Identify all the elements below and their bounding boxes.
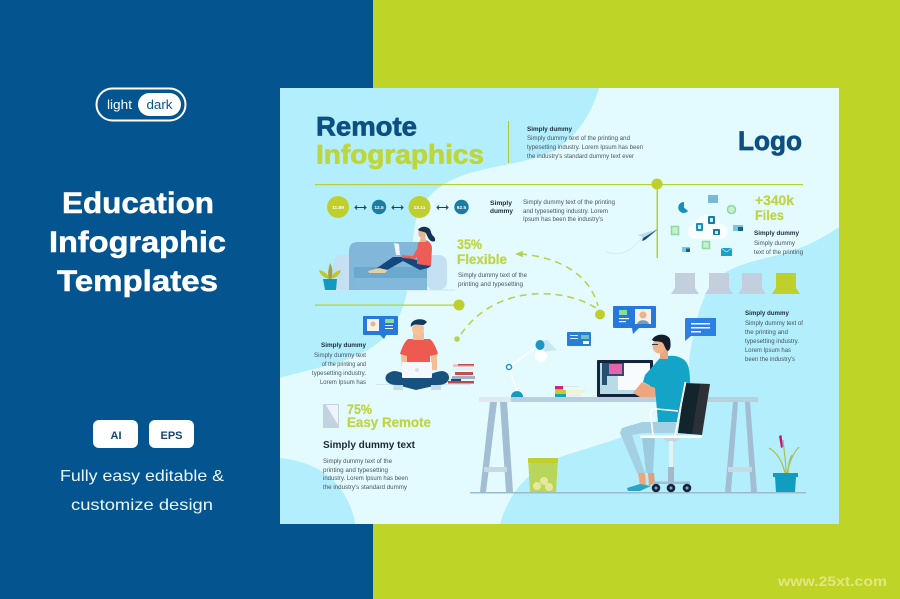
illustration: desk (479, 397, 758, 492)
stat: 35% flexible: 35% (457, 237, 482, 252)
stat: 35% flexible (457, 237, 528, 288)
text: simply dummy left (312, 342, 367, 386)
heading: education infographic templates: Education (62, 187, 214, 220)
text: editable description: customize design (71, 497, 213, 514)
heading: education infographic templates: Infographic (49, 226, 226, 259)
speech bubble: video call (363, 316, 398, 339)
divider with node: top (315, 178, 803, 258)
text block: simply dummy text: Simply dummy text (323, 439, 415, 451)
toggle: light and dark: dark (146, 98, 173, 112)
title: Infographics (316, 140, 484, 170)
stat: 75% easy remote: 75% (347, 402, 372, 417)
icon cluster: cloud files (672, 195, 743, 256)
text: simply dummy left: of the printing and (322, 362, 366, 368)
toggle: light and dark (96, 88, 186, 120)
badge: EPS (149, 420, 194, 448)
text: simply dummy right: the printing and (745, 330, 788, 336)
infographic panel (280, 88, 839, 524)
text block: simply dummy text (323, 439, 415, 491)
icon: potted plant right (769, 435, 799, 492)
text: simply dummy left: Simply dummy (321, 342, 367, 349)
stat: 75% easy remote (323, 402, 431, 430)
stat: +340k files: +340k (755, 193, 794, 208)
text: simply dummy right: typesetting industry. (745, 339, 799, 345)
background: navy left column (0, 0, 373, 599)
dashed arrows (455, 252, 605, 341)
logo: Logo (738, 126, 802, 156)
text: simply dummy steps: Simply dummy text of the printing (523, 200, 615, 206)
icon: paper plane (606, 229, 658, 254)
illustration: man working at desk (620, 335, 690, 491)
text: simply dummy right: Lorem Ipsum has (745, 348, 791, 354)
background blob: bottom left (280, 458, 355, 524)
step sequence: 11.89 (332, 205, 344, 211)
illustration: man sitting with laptop (376, 319, 471, 390)
stat: 35% flexible: printing and typesetting (458, 282, 523, 288)
intro text block: Simply dummy text of the printing and (527, 136, 630, 142)
divider with node: middle (315, 300, 464, 310)
icon: potted plant left (319, 263, 341, 290)
text: simply dummy right: Simply dummy text of (745, 321, 803, 327)
icon: desk lamp (506, 340, 557, 397)
icon: books on desk (555, 386, 585, 397)
text: simply dummy left: typesetting industry. (312, 371, 366, 377)
text block: simply dummy text: industry. Lorem Ipsum has been (323, 476, 408, 482)
badge: EPS: EPS (160, 430, 183, 442)
text: simply dummy left: Simply dummy text (314, 353, 366, 359)
left column: promotional content (49, 88, 226, 514)
text: editable description: Fully easy editable & (60, 468, 224, 485)
heading: education infographic templates (49, 187, 226, 298)
step sequence (327, 196, 469, 218)
illustration: monitor (597, 360, 653, 397)
text block: simply dummy text: Simply dummy text of the (323, 459, 393, 465)
intro text block: Simply dummy (527, 126, 573, 133)
text: simply dummy right: been the industry's (745, 357, 795, 363)
heading: education infographic templates: Templates (57, 265, 218, 298)
stat: +340k files (754, 193, 803, 256)
background blob: right (500, 227, 839, 524)
floor line (470, 492, 806, 494)
title: Remote (316, 112, 417, 142)
text: simply dummy right: Simply dummy (745, 310, 790, 317)
text: simply dummy steps: Simply (490, 200, 513, 207)
stat: +340k files: Simply dummy (754, 241, 795, 247)
watermark: www.25xt.com (777, 573, 887, 589)
text block: simply dummy text: the industry's standard dummy (323, 485, 407, 491)
speech bubble: message (685, 318, 716, 341)
speech bubble: video profile (613, 306, 656, 334)
step sequence: 62.5 (457, 205, 466, 211)
text: simply dummy steps: Ipsum has been the industry's (523, 217, 603, 223)
background blob: top left (280, 88, 599, 378)
icon: small blue widget (567, 332, 591, 346)
text: simply dummy left: Lorem Ipsum has (320, 380, 366, 386)
stat: 35% flexible: Flexible (457, 252, 507, 267)
step sequence: 12.5 (374, 205, 384, 211)
illustration: office chair (640, 382, 710, 492)
stat: +340k files: text of the printing (754, 250, 803, 256)
text: simply dummy steps (490, 200, 615, 223)
badge: AI: AI (110, 430, 122, 442)
stat: +340k files: Simply dummy (754, 230, 800, 237)
text: simply dummy steps: and typesetting industry. Lorem (523, 209, 608, 215)
text: editable description (60, 468, 224, 514)
text: simply dummy steps: dummy (490, 208, 514, 215)
icon: waste bin (528, 458, 558, 492)
stat: 35% flexible: Simply dummy text of the (458, 273, 528, 279)
badge: AI (93, 420, 138, 448)
stat: 75% easy remote: Easy Remote (347, 415, 431, 430)
step sequence: 13.11 (414, 205, 426, 211)
icons: laptops (671, 273, 800, 294)
stat: +340k files: Files (755, 208, 784, 223)
text: simply dummy right (745, 310, 803, 363)
illustration: woman on sofa (325, 227, 455, 290)
intro text block (508, 121, 643, 163)
intro text block: typesetting industry. Lorem Ipsum has been (527, 145, 643, 151)
toggle: light and dark: light (107, 98, 133, 112)
icon: book stack (448, 364, 475, 384)
intro text block: the industry's standard dummy text ever (527, 154, 634, 160)
text block: simply dummy text: printing and typesetting (323, 468, 388, 474)
panel background (280, 88, 839, 524)
title (316, 112, 484, 170)
background: lime right column (373, 0, 900, 599)
